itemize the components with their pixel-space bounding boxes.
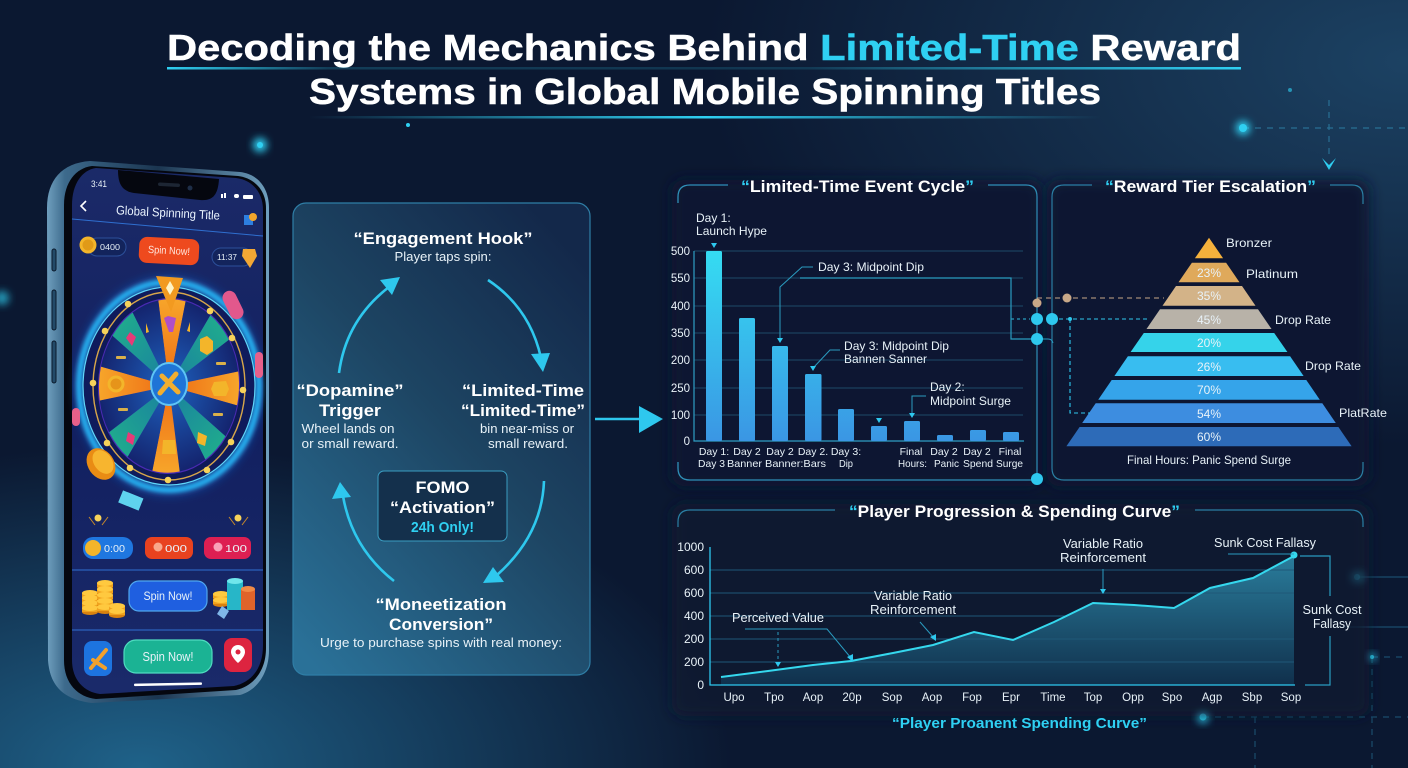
lower chips: 000 (165, 544, 188, 555)
pyramid chart: 60% (1197, 430, 1221, 444)
bottom buttons: Spin Now! (142, 650, 194, 664)
step: monetization conversion (320, 595, 562, 650)
y axis labels: 200 (684, 655, 704, 669)
annotations: Day 3: Midpoint Dip (844, 339, 949, 353)
connector lines between panels (800, 278, 1164, 485)
panel: reward tier escalation (1047, 178, 1387, 486)
phone screen (72, 168, 265, 694)
step: limited-time: “Limited-Time” (461, 401, 585, 420)
bottom buttons (84, 638, 252, 686)
spinning wheel (72, 274, 265, 511)
y axis labels: 400 (684, 609, 704, 623)
y axis labels: 250 (671, 383, 690, 395)
step: engagement hook: “Engagement Hook” (354, 229, 532, 248)
x axis labels: Day 2 (963, 446, 991, 458)
tier labels: PlatRate (1339, 406, 1387, 420)
callout: FOMO activation: FOMO (416, 478, 470, 497)
step: limited-time: small reward. (488, 436, 568, 451)
pyramid chart: 26% (1197, 360, 1221, 374)
annotations: Day 2: (930, 380, 965, 394)
x axis labels: Day 3 (698, 458, 725, 470)
step: limited-time: “Limited-Time (462, 381, 584, 400)
x axis labels (698, 446, 1023, 470)
panel: limited-time event cycle (671, 178, 1042, 486)
x axis labels: Epr (1002, 692, 1020, 704)
lower chips: 100 (225, 544, 248, 555)
x axis labels: Opp (1122, 692, 1144, 704)
annotations: Reinforcement (1060, 551, 1147, 565)
annotations: Variable Ratio (874, 589, 952, 603)
y axis labels: 600 (684, 563, 704, 577)
x axis labels: Day 1: (699, 446, 729, 458)
lower chips (72, 514, 263, 570)
bracket: sunk cost fallacy (1300, 556, 1362, 685)
currency chips: Spin Now! (148, 244, 190, 258)
heading: “Player Progression & Spending Curve ” (849, 503, 1180, 521)
x axis labels: Aop (803, 692, 823, 704)
x axis labels: Upo (723, 692, 745, 704)
x axis labels: Spend (963, 458, 993, 470)
y axis labels: 550 (671, 273, 690, 285)
step: dopamine trigger: Trigger (319, 401, 381, 420)
y axis labels: 350 (671, 328, 690, 340)
line chart (677, 536, 1362, 704)
step: dopamine trigger: or small reward. (302, 436, 398, 451)
pyramid chart: 23% (1197, 266, 1221, 280)
x axis labels: Spo (1162, 692, 1182, 704)
annotations: Midpoint Surge (930, 394, 1011, 408)
currency chips: 11:37 (217, 252, 237, 262)
y axis labels: 600 (684, 586, 704, 600)
annotations: Perceived Value (732, 611, 824, 625)
pyramid chart: 35% (1197, 289, 1221, 303)
x axis labels: Time (1040, 692, 1066, 704)
pyramid chart (1066, 238, 1352, 446)
step: engagement hook: Player taps spin: (394, 249, 492, 264)
bracket: sunk cost fallacy: Sunk Cost (1302, 603, 1362, 617)
x axis labels (723, 692, 1301, 704)
annotations: Bannen Sanner (844, 352, 927, 366)
x axis labels: Agp (1202, 692, 1222, 704)
annotations: Sunk Cost Fallasy (1214, 536, 1317, 550)
callout: FOMO activation: “Activation” (390, 498, 495, 517)
phone mockup (47, 161, 269, 703)
x axis labels: Dip (839, 458, 853, 470)
pyramid chart: 54% (1197, 407, 1221, 421)
y axis labels: 0 (697, 678, 704, 692)
y axis labels: 0 (684, 436, 690, 448)
x axis labels: Top (1084, 692, 1102, 704)
tier labels: Platinum (1246, 267, 1298, 281)
step: monetization conversion: “Moneetization (376, 595, 506, 614)
x axis labels: Banner (727, 458, 763, 470)
panel: engagement cycle (293, 203, 590, 675)
tier labels: Drop Rate (1305, 359, 1361, 373)
x axis labels: Day 2 (930, 446, 958, 458)
title (167, 27, 1241, 118)
step: dopamine trigger (296, 381, 404, 451)
annotations (732, 536, 1317, 667)
arrow: cycle to charts (595, 406, 663, 433)
y axis labels: 1000 (677, 540, 704, 554)
x axis labels: Aop (922, 692, 942, 704)
step: dopamine trigger: Wheel lands on (302, 421, 394, 436)
x axis labels: Panic (934, 458, 959, 470)
pyramid chart: 45% (1197, 313, 1221, 327)
title: Systems in Global Mobile Spinning Titles (309, 71, 1101, 112)
x axis labels: Hours: (898, 458, 927, 470)
phone screen: Global Spinning Title (116, 203, 220, 223)
panel: player progression and spending curve (672, 503, 1369, 732)
cycle arrows (332, 277, 550, 583)
pyramid chart: 20% (1197, 336, 1221, 350)
callout: FOMO activation (378, 471, 507, 541)
tier labels: Final Hours: Panic Spend Surge (1127, 453, 1291, 467)
x axis labels: 20p (842, 692, 862, 704)
currency chips: 0400 (100, 242, 120, 252)
lower chips: 0:00 (104, 544, 125, 555)
x axis labels: Sop (1281, 692, 1301, 704)
tier labels: Bronzer (1226, 236, 1272, 250)
x axis labels: Final (999, 446, 1021, 458)
callout: FOMO activation: 24h Only! (411, 519, 474, 536)
x axis labels: Tpo (764, 692, 784, 704)
annotations (696, 211, 1011, 423)
x axis labels: Final (900, 446, 922, 458)
y axis labels: 200 (684, 632, 704, 646)
bracket: sunk cost fallacy: Fallasy (1313, 617, 1352, 631)
x axis labels: Day 2 (766, 446, 794, 458)
phone screen: 3:41 (91, 179, 107, 189)
y axis labels (671, 246, 690, 448)
step: dopamine trigger: “Dopamine” (296, 381, 404, 400)
step: limited-time: bin near-miss or (480, 421, 575, 436)
tier labels: Drop Rate (1275, 313, 1331, 327)
x axis labels: Fop (962, 692, 982, 704)
x axis labels: Sop (882, 692, 902, 704)
coin stacks and blue button (72, 578, 263, 630)
x axis labels: Surge (996, 458, 1023, 470)
y axis labels: 500 (671, 246, 690, 258)
step: limited-time (461, 381, 585, 451)
title: Decoding the Mechanics Behind Limited-Time Reward (167, 27, 1241, 68)
step: monetization conversion: Urge to purchase spins with real money: (320, 635, 562, 650)
heading: “Reward Tier Escalation ” (1105, 178, 1316, 196)
phone body (47, 161, 269, 703)
annotations: Launch Hype (696, 224, 767, 238)
y axis labels (677, 540, 704, 692)
heading: “Limited-Time Event Cycle ” (741, 178, 974, 196)
x axis labels: Day 2. (798, 446, 828, 458)
pyramid chart: 70% (1197, 383, 1221, 397)
annotations: Day 3: Midpoint Dip (818, 260, 924, 274)
x axis labels: Banner:Bars (765, 458, 826, 470)
tier labels (1127, 236, 1387, 467)
currency chips (80, 236, 257, 268)
annotations: Day 1: (696, 211, 731, 225)
step: engagement hook (354, 229, 532, 264)
annotations: Variable Ratio (1063, 537, 1143, 551)
x axis labels: Day 3: (831, 446, 861, 458)
step: monetization conversion: Conversion” (389, 615, 493, 634)
bar chart (671, 211, 1024, 470)
x axis labels: Sbp (1242, 692, 1262, 704)
y axis labels: 400 (671, 301, 690, 313)
y axis labels: 200 (671, 355, 690, 367)
caption: “Player Proanent Spending Curve” (892, 715, 1147, 732)
x axis labels: Day 2 (733, 446, 761, 458)
y axis labels: 100 (671, 410, 690, 422)
annotations: Reinforcement (870, 603, 957, 617)
coin stacks and blue button: Spin Now! (144, 591, 192, 603)
